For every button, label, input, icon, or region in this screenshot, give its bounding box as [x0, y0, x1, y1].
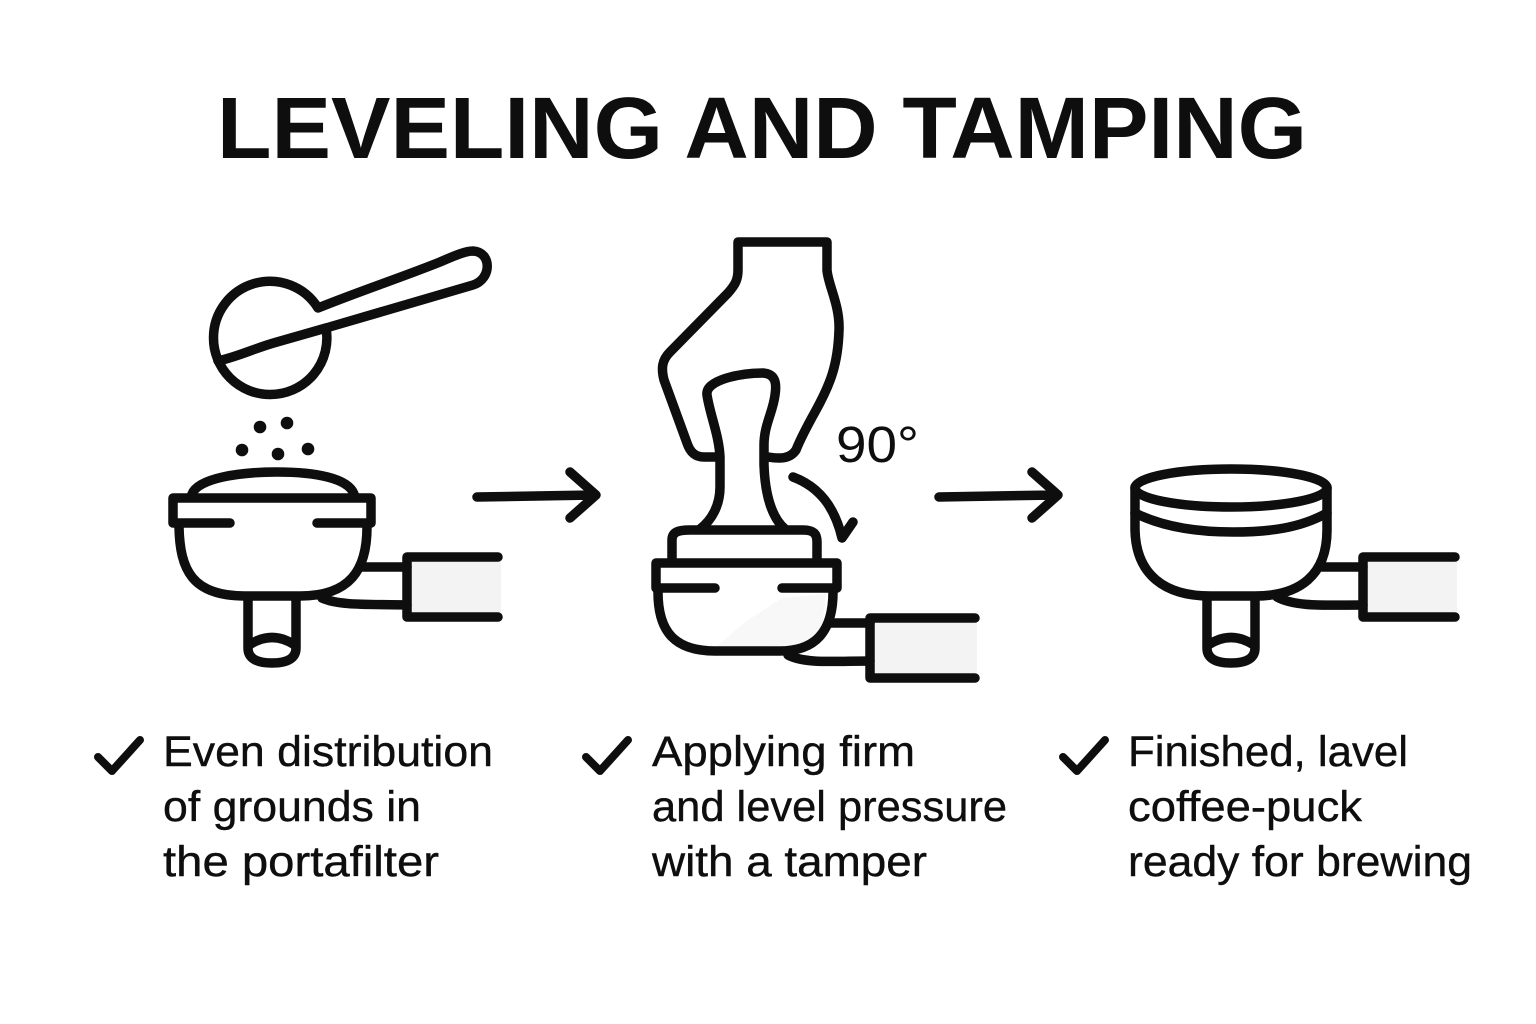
icon: hand: [662, 242, 839, 458]
icon: falling coffee grounds: [236, 417, 314, 460]
caption text: Finished, lavel: [1128, 728, 1408, 776]
annotation: 90 degrees: 90°: [836, 416, 919, 473]
caption text: the portafilter: [163, 838, 439, 886]
caption text: of grounds in: [163, 783, 421, 831]
title: LEVELING AND TAMPING: [217, 80, 1307, 177]
arrow: step 2 to step 3: [939, 472, 1058, 518]
caption text: with a tamper: [651, 838, 927, 886]
icon: finished portafilter: [1135, 469, 1457, 663]
icon: tamper: [672, 373, 817, 558]
arrow: step 1 to step 2: [477, 472, 596, 518]
arrow: curved tamping direction: [793, 477, 853, 538]
icon: check mark: [1063, 740, 1105, 771]
caption text: [651, 728, 1007, 886]
panel: step 2 illustration: [656, 242, 977, 678]
caption text: [1128, 728, 1472, 886]
icon: coffee scoop: [213, 251, 487, 395]
caption text: and level pressure: [652, 783, 1007, 831]
icon: check mark: [98, 740, 140, 771]
icon: portafilter with grounds: [173, 472, 501, 663]
icon: portafilter under tamper: [656, 563, 977, 678]
caption text: Even distribution: [163, 728, 493, 776]
caption: step 2: [586, 728, 1007, 886]
panel: step 1 illustration: [173, 251, 501, 663]
caption text: [163, 728, 493, 886]
caption text: coffee-puck: [1128, 783, 1363, 831]
panel: step 3 illustration: [1135, 469, 1457, 663]
icon: check mark: [586, 740, 628, 771]
caption text: Applying firm: [652, 728, 915, 776]
caption: step 1: [98, 728, 493, 886]
caption: step 3: [1063, 728, 1472, 886]
caption text: ready for brewing: [1128, 838, 1472, 886]
